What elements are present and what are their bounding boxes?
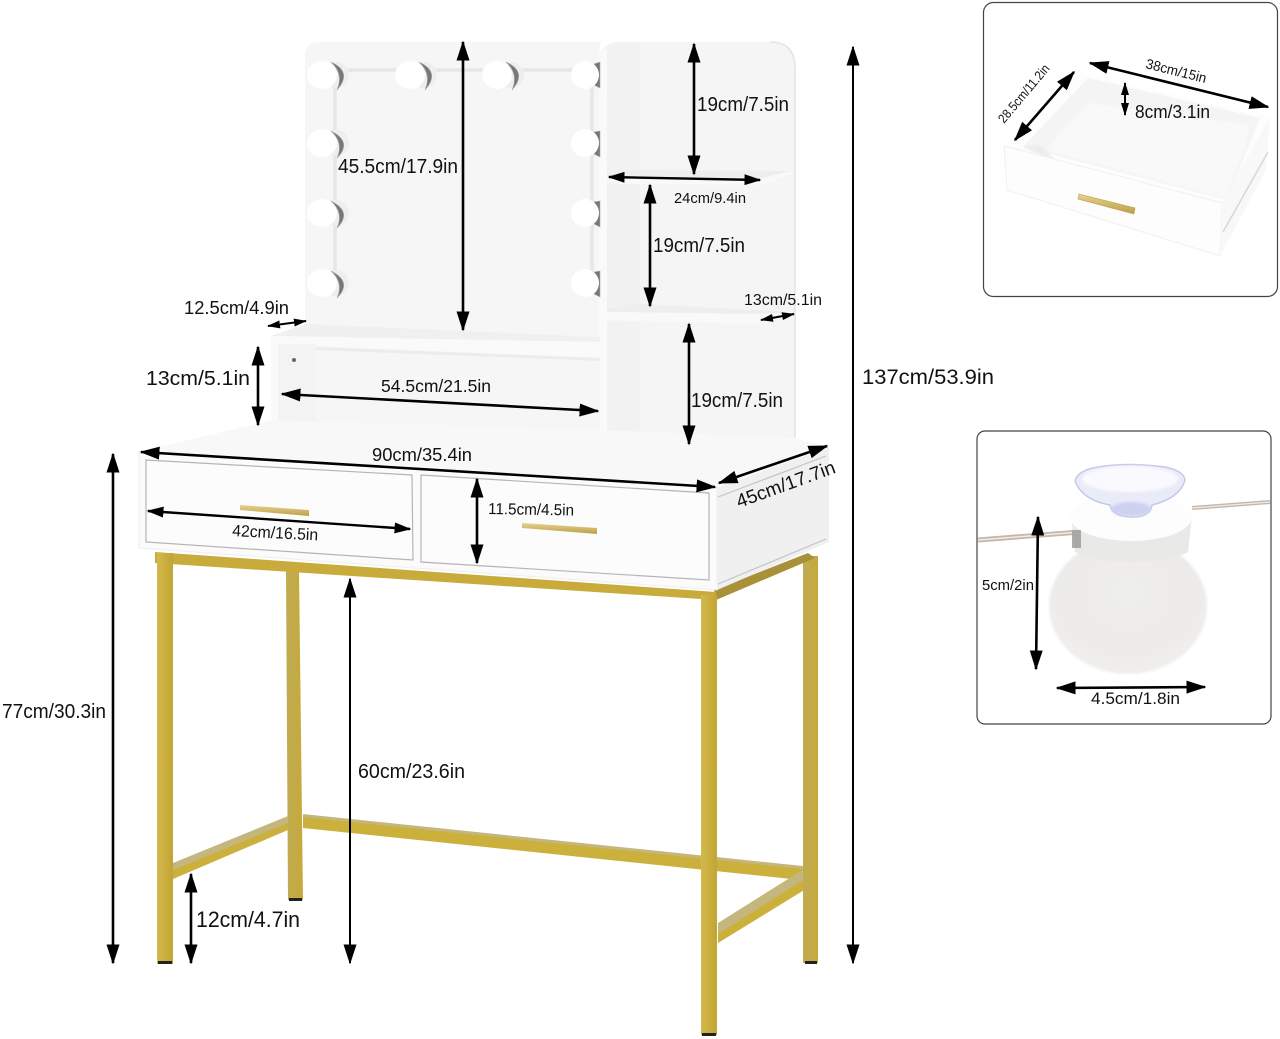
dimension labels: main table: 24cm/9.4in: [674, 190, 746, 207]
dimension labels: main table: 45.5cm/17.9in: [338, 156, 458, 178]
dimension labels: main table: 13cm/5.1in: [744, 292, 822, 309]
panel: drawer detail: [984, 2, 1278, 296]
dimension labels: main table: 19cm/7.5in: [697, 94, 789, 116]
wires: [978, 502, 1270, 540]
bulb dimension labels: 4.5cm/1.8in: [1091, 689, 1180, 708]
drawer dimension labels: 38cm/15in: [1144, 55, 1208, 86]
drawer illustration: [1004, 72, 1270, 256]
suction cup: [1075, 464, 1185, 517]
dimension labels: main table: 19cm/7.5in: [653, 235, 745, 257]
drawer dimension labels: 8cm/3.1in: [1135, 102, 1210, 122]
dimension labels: main table: 60cm/23.6in: [358, 761, 465, 783]
front top rail: [155, 552, 716, 600]
back panel with mirror: [305, 42, 600, 340]
bulb dimension labels: [982, 577, 1180, 708]
dimension labels: main table: [2, 94, 994, 932]
vanity table illustration: [139, 42, 829, 1036]
dimension labels: main table: 19cm/7.5in: [691, 390, 783, 412]
drawer dimension arrows: [1015, 63, 1268, 140]
bulb globe: [1049, 538, 1207, 674]
lower shelf: [607, 304, 792, 314]
drawer handle: [1078, 194, 1135, 214]
right drawer handle: [522, 523, 597, 534]
desk body: [139, 420, 829, 590]
panel: light bulb detail: [977, 431, 1271, 724]
riser shelf: [271, 324, 600, 430]
right stretcher: [718, 876, 814, 943]
dimension labels: main table: 45cm/17.7in: [734, 457, 838, 513]
dimension arrows: main table: [113, 42, 853, 963]
left drawer: [146, 460, 413, 560]
drawer dimension labels: [995, 55, 1210, 126]
dimension labels: main table: 12cm/4.7in: [196, 907, 300, 932]
dimension labels: main table: 12.5cm/4.9in: [184, 298, 289, 318]
dimension labels: main table: 54.5cm/21.5in: [381, 376, 491, 396]
bulb dimension arrows: [1036, 517, 1205, 688]
bulb collar: [1070, 493, 1192, 562]
dimension labels: main table: 11.5cm/4.5in: [488, 501, 574, 520]
rear stretcher: [303, 816, 803, 880]
right side top rail: [714, 553, 815, 600]
right drawer: [421, 475, 709, 580]
bulb dimension labels: 5cm/2in: [982, 577, 1034, 594]
drawer dimension labels: 28.5cm/11.2in: [995, 61, 1053, 126]
mirror lights wiring: [335, 70, 592, 285]
left drawer handle: [240, 505, 309, 516]
dimension labels: main table: 42cm/16.5in: [232, 522, 319, 544]
dimension labels: main table: 90cm/35.4in: [372, 444, 472, 465]
left stretcher: [173, 822, 288, 879]
dimension labels: main table: 137cm/53.9in: [862, 365, 994, 389]
gold metal frame: [155, 552, 818, 1036]
mirror bulbs: [307, 61, 600, 298]
upper shelf: [607, 170, 792, 178]
dimension labels: main table: 13cm/5.1in: [146, 367, 250, 390]
shelf unit: [599, 42, 795, 450]
dimension labels: main table: 77cm/30.3in: [2, 701, 106, 723]
